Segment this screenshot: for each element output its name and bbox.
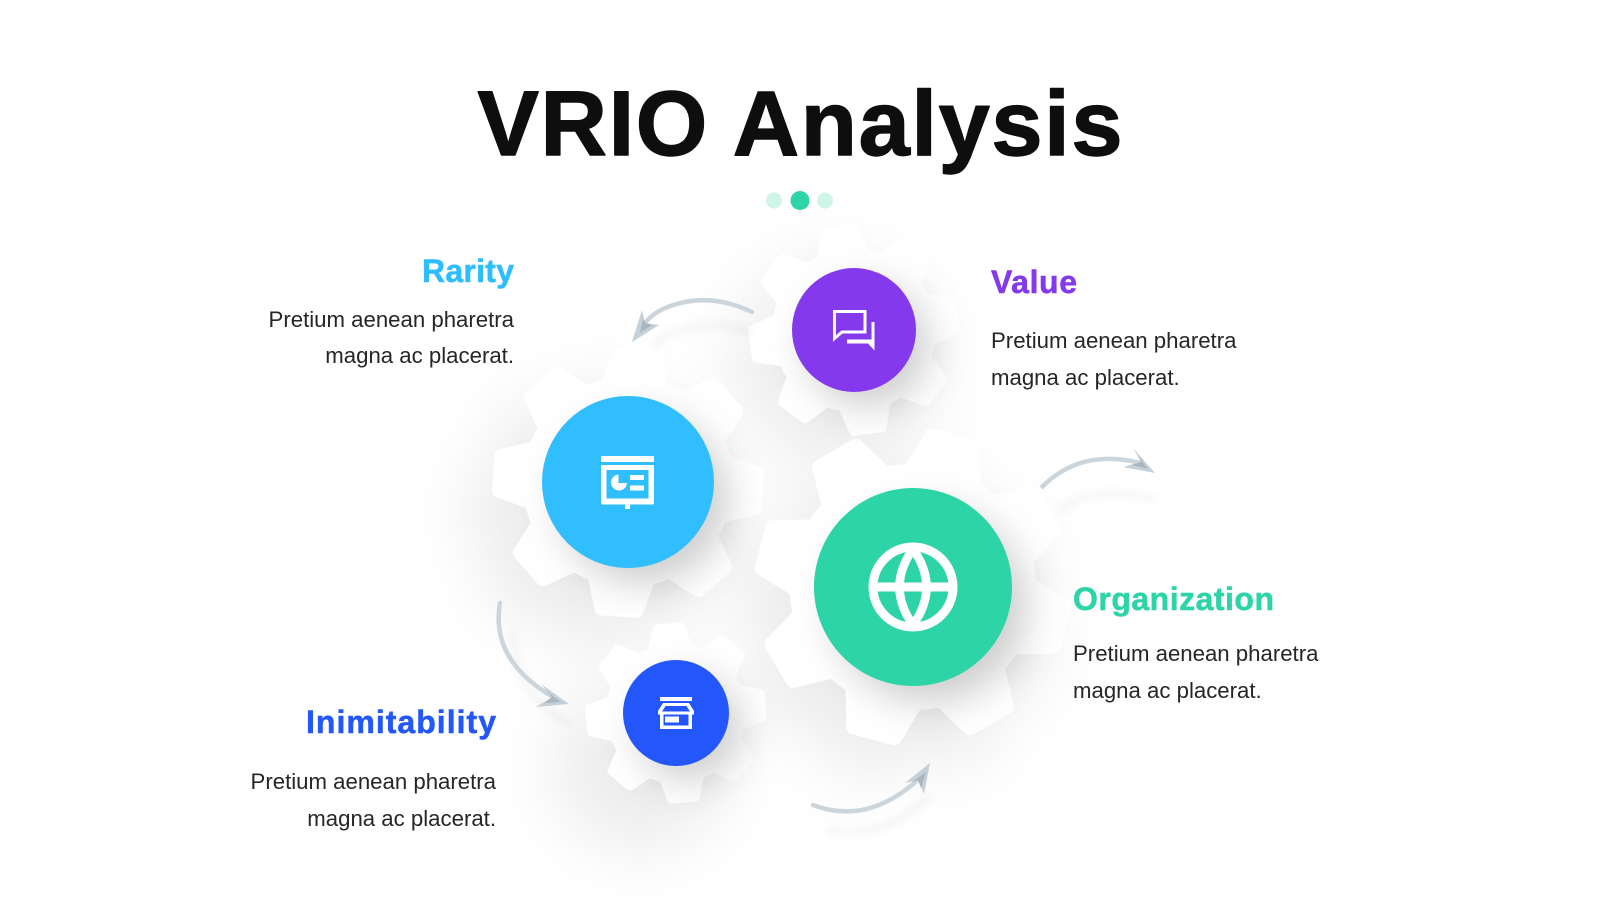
- node: organization: [814, 488, 1012, 686]
- heading: rarity: Rarity: [422, 253, 514, 289]
- node: inimitability: [623, 660, 729, 766]
- arrow: inimitability to organization: [813, 763, 930, 832]
- text block: organization: [1073, 581, 1319, 703]
- description: rarity: Pretium aenean pharetra: [269, 307, 515, 332]
- gear: inimitability: [578, 615, 774, 811]
- text block: rarity: [269, 253, 515, 368]
- title: VRIO Analysis: [478, 73, 1122, 175]
- gear shadows: [456, 241, 1089, 863]
- circle shadows: [561, 286, 1026, 780]
- node: rarity: [542, 396, 714, 568]
- pagination dots: [766, 191, 833, 210]
- text block: value: [991, 264, 1237, 390]
- heading: value: Value: [991, 264, 1077, 300]
- gear: value: [735, 211, 973, 449]
- description: rarity: magna ac placerat.: [325, 343, 514, 368]
- text block: inimitability: [251, 704, 497, 831]
- description: organization: magna ac placerat.: [1073, 678, 1262, 703]
- gear: organization: [719, 393, 1107, 781]
- icon: chat bubbles: [834, 312, 874, 350]
- description: value: Pretium aenean pharetra: [991, 328, 1237, 353]
- heading: organization: Organization: [1073, 581, 1274, 617]
- arrow: rarity to inimitability: [499, 603, 570, 725]
- icon: archive box: [658, 697, 694, 729]
- icon: presentation board: [601, 456, 654, 509]
- node: value: [792, 268, 916, 392]
- heading: inimitability: Inimitability: [306, 704, 496, 740]
- description: inimitability: Pretium aenean pharetra: [251, 769, 497, 794]
- icon: globe: [873, 547, 953, 627]
- gear: rarity: [484, 338, 772, 626]
- arrow: organization to value: [1041, 448, 1155, 512]
- description: organization: Pretium aenean pharetra: [1073, 641, 1319, 666]
- arrow: value to rarity: [632, 300, 752, 348]
- description: inimitability: magna ac placerat.: [307, 806, 496, 831]
- description: value: magna ac placerat.: [991, 365, 1180, 390]
